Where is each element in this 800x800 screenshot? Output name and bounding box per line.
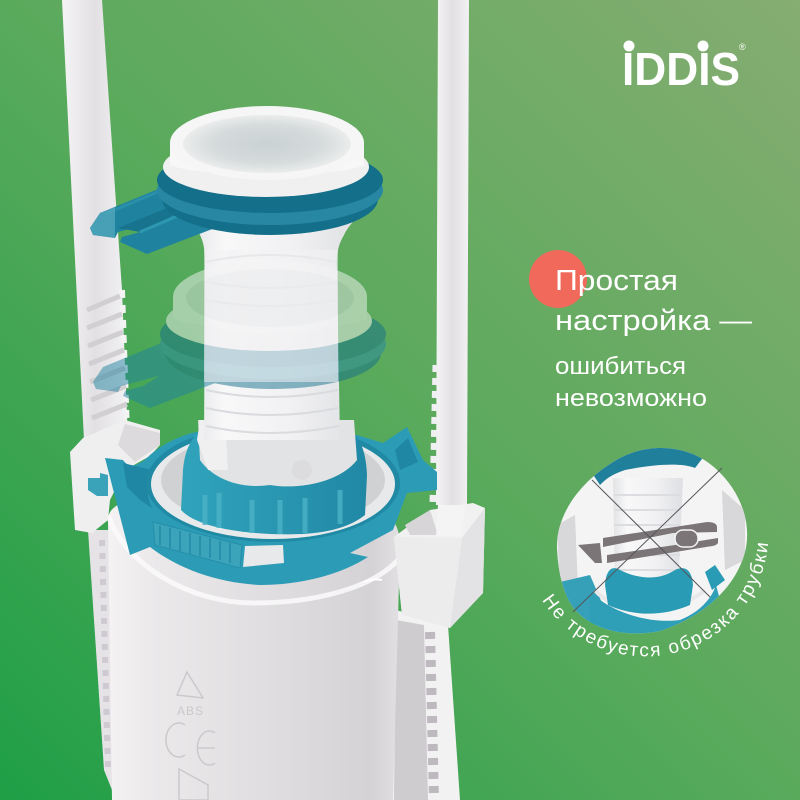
- crossed knife icon: [573, 468, 722, 612]
- ghost collar lower position: [93, 260, 386, 408]
- handle frame: [90, 183, 228, 254]
- lower right strip: [392, 610, 460, 800]
- white cup flange: [163, 137, 369, 197]
- left handle tip highlight: [90, 207, 115, 238]
- ring grip detail: [153, 522, 242, 568]
- translucent tube overlay: [204, 250, 338, 382]
- lower left strip: [88, 530, 112, 790]
- upper collar position: [90, 106, 383, 254]
- logo: iddis: ®: [739, 42, 746, 52]
- subheading lines: ошибиться: [555, 353, 686, 380]
- subheading lines: [555, 353, 707, 412]
- white flared tube: [190, 210, 359, 440]
- red accent circle: [529, 250, 587, 308]
- curved caption: Не требуется обрезка трубки: [542, 543, 768, 656]
- left white clip: [70, 420, 160, 533]
- embossed markings on body: [166, 672, 215, 800]
- headline text: [529, 250, 752, 412]
- cup rim: [170, 106, 364, 180]
- ring window: [243, 545, 284, 567]
- teal threaded nut: [181, 433, 367, 534]
- main white cylinder body: [108, 490, 400, 800]
- heading lines: Простая: [555, 265, 678, 297]
- inner white tube base: [197, 420, 357, 486]
- subheading lines: невозможно: [555, 385, 707, 412]
- right white clip: [394, 503, 485, 628]
- inset: no tube trimming required: [542, 448, 768, 656]
- inset photo circle: [556, 448, 748, 634]
- left adjustment strip: [62, 0, 128, 440]
- heading lines: [555, 265, 752, 337]
- logo: iddis: IDDIS: [622, 43, 740, 95]
- teal base ring: [105, 424, 437, 585]
- teal adjustment ring: [162, 163, 378, 235]
- heading lines: настройка —: [555, 305, 752, 337]
- right adjustment strip: [433, 0, 469, 505]
- embossed markings on body: ABS: [177, 704, 204, 718]
